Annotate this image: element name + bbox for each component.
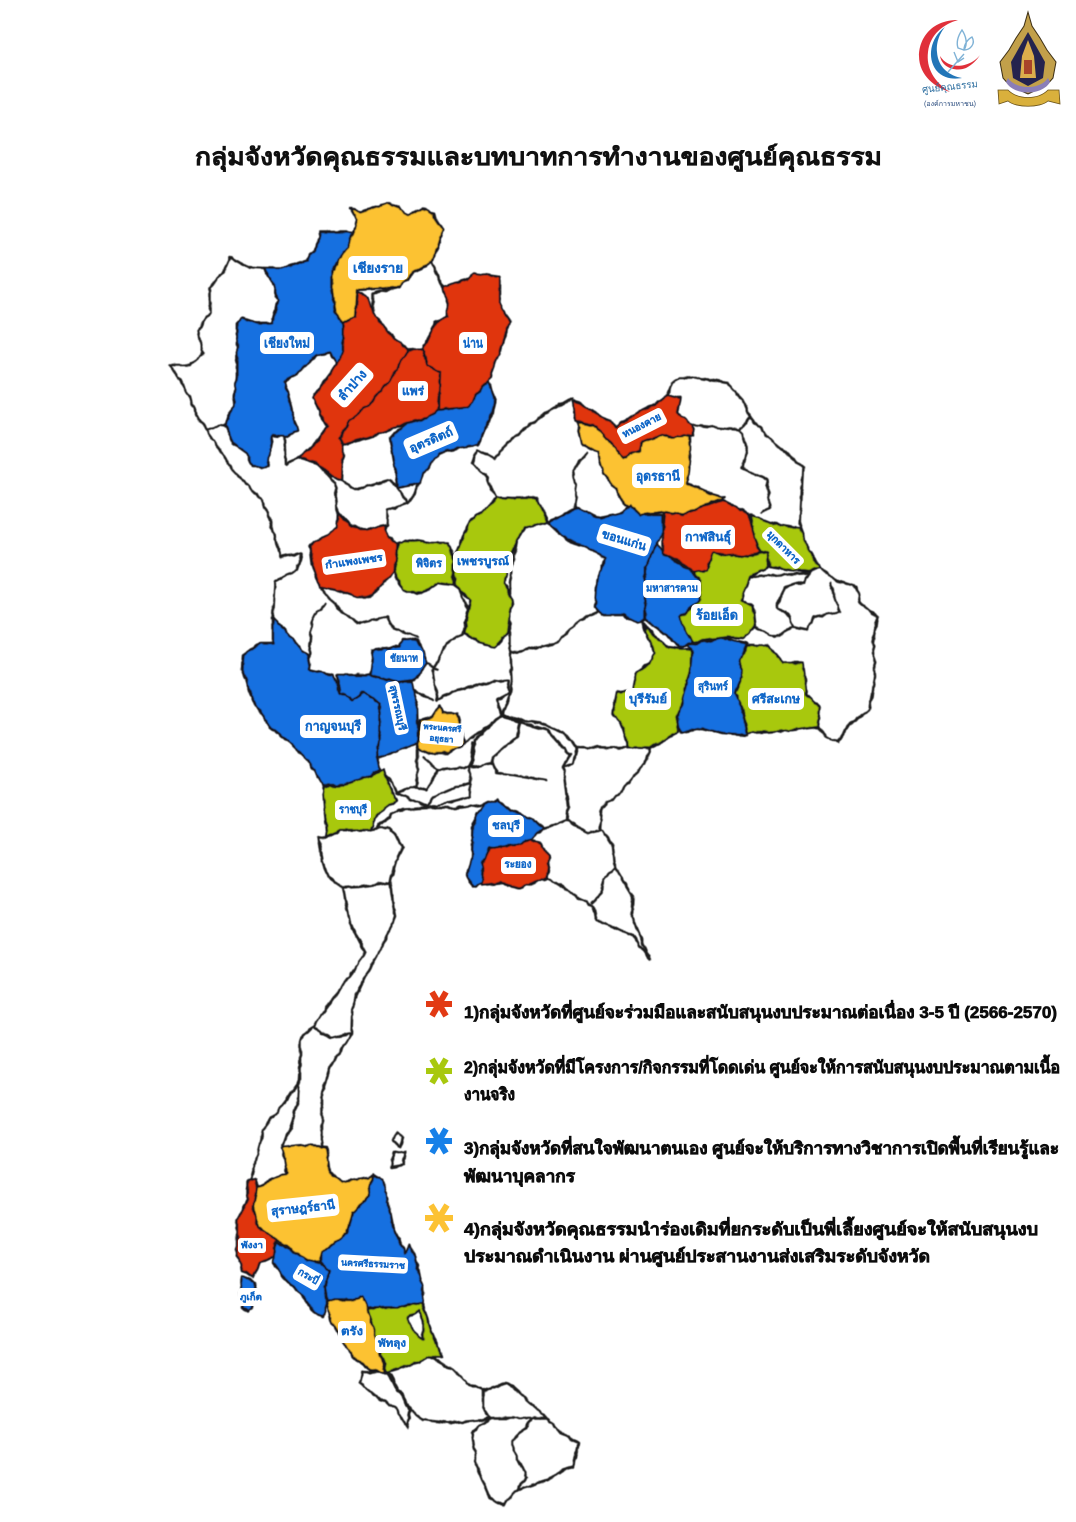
label: Suphan Buri	[385, 680, 409, 736]
label: Khon Kaen: ขอนแก่น	[600, 527, 649, 554]
province: Suphan Buri	[337, 675, 418, 757]
label: Nan	[459, 332, 487, 354]
label: Nan: น่าน	[463, 336, 483, 350]
label: Khon Kaen	[595, 523, 653, 557]
province: Nakhon Si Thammarat	[320, 1175, 423, 1308]
province: Phang Nga	[237, 1180, 277, 1277]
label: Phrae: แพร่	[402, 384, 425, 398]
label: Surin	[694, 677, 732, 697]
label: Phatthalung	[375, 1335, 409, 1353]
label: Buriram	[625, 688, 671, 710]
legend	[425, 992, 1060, 1268]
label: Kanchanaburi	[300, 715, 366, 738]
legend item 4: ประมาณดำเนินงาน ผ่านศูนย์ประสานงานส่งเสริมระดับจังหวัด	[464, 1246, 930, 1268]
province: Phuket	[240, 1277, 255, 1312]
white province outlines	[170, 257, 877, 1505]
label: Chonburi: ชลบุรี	[492, 819, 520, 833]
province: Phetchabun	[453, 497, 548, 647]
label: Mukdahan: มุกดาหาร	[764, 529, 802, 567]
logo: moral center	[919, 20, 980, 108]
province: Mae Hong Son neighbour Chiang Mai	[225, 232, 353, 467]
province: Rayong	[482, 840, 550, 888]
label: Ayutthaya	[419, 720, 465, 747]
label: Phetchabun: เพชรบูรณ์	[457, 555, 510, 569]
legend item 1	[426, 992, 1057, 1024]
label: Krabi: กระบี่	[296, 1264, 322, 1287]
label: Roi Et	[691, 604, 743, 626]
label: Kalasin	[681, 525, 735, 549]
label: Maha Sarakham: มหาสารคาม	[646, 584, 698, 594]
province: Mukdahan	[750, 515, 820, 572]
label: Sisaket: ศรีสะเกษ	[752, 692, 800, 706]
province: Nan	[423, 273, 510, 411]
label: Uttaradit	[402, 419, 460, 461]
province: Kalasin	[663, 500, 760, 572]
label: Phuket	[238, 1288, 264, 1306]
label: Buriram: บุรีรัมย์	[629, 692, 667, 707]
province: Trang	[327, 1297, 385, 1373]
label: Nong Khai: หนองคาย	[621, 412, 663, 440]
province: Chai Nat	[370, 638, 427, 682]
label: Chai Nat	[385, 650, 423, 668]
legend item 3	[426, 1129, 1059, 1187]
label: Udon Thani: อุดรธานี	[636, 468, 680, 484]
label: Kalasin: กาฬสินธุ์	[685, 530, 731, 545]
province: Kamphaeng Phet	[310, 513, 397, 597]
legend item 4	[425, 1205, 1038, 1268]
label: Nong Khai	[616, 407, 668, 445]
label: Chiang Rai	[348, 256, 408, 280]
legend item 2: งานจริง	[464, 1085, 515, 1104]
label: Roi Et: ร้อยเอ็ด	[696, 606, 738, 622]
map of Thailand	[170, 203, 877, 1505]
label: Ayutthaya: พระนครศรี	[423, 721, 463, 734]
province: Nong Khai	[573, 395, 693, 458]
label: Phetchabun	[453, 551, 513, 573]
label: Sisaket	[748, 688, 804, 710]
label: Phang Nga	[238, 1238, 266, 1253]
province: Phatthalung	[368, 1303, 442, 1372]
label: Chiang Mai: เชียงใหม่	[264, 334, 310, 350]
label: Phatthalung: พัทลุง	[378, 1338, 406, 1350]
label: Krabi	[291, 1262, 325, 1292]
province: Chiang Rai	[332, 203, 443, 323]
legend item 1: 1)กลุ่มจังหวัดที่ศูนย์จะร่วมมือและสนับสนุนงบประมาณต่อเนื่อง 3-5 ปี (2566-2570)	[464, 1000, 1057, 1024]
label: Chiang Rai: เชียงราย	[353, 260, 403, 276]
province: Surin	[677, 638, 747, 735]
label: Nakhon Si Thammarat: นครศรีธรรมราช	[341, 1257, 405, 1271]
province: Uttaradit	[390, 380, 495, 488]
province: Sisaket	[735, 645, 820, 733]
label: Kamphaeng Phet	[321, 549, 387, 575]
label: Chai Nat: ชัยนาท	[390, 652, 418, 664]
province: Khon Kaen	[548, 505, 663, 622]
label: Phang Nga: พังงา	[241, 1240, 263, 1250]
label: Phuket: ภูเก็ต	[240, 1290, 262, 1303]
province: Krabi	[273, 1242, 330, 1317]
label: Trang	[338, 1321, 366, 1343]
label: Ratchaburi	[335, 800, 371, 820]
logo: moral center: (องค์การมหาชน)	[924, 100, 976, 108]
label: Maha Sarakham	[643, 580, 701, 598]
province: Kanchanaburi	[242, 618, 380, 785]
label: Lampang: ลำปาง	[334, 367, 370, 403]
label: Mukdahan	[760, 525, 806, 571]
label: Phrae	[398, 381, 428, 401]
label: Surat Thani	[266, 1193, 340, 1223]
province: Maha Sarakham	[645, 543, 700, 647]
logo: emblem	[998, 12, 1060, 106]
label: Surin: สุรินทร์	[698, 680, 728, 694]
province: Lampang	[298, 292, 408, 480]
label: Ratchaburi: ราชบุรี	[339, 803, 367, 817]
label: Nakhon Si Thammarat	[338, 1254, 408, 1274]
province: Ratchaburi	[323, 770, 397, 838]
label: Trang: ตรัง	[341, 1325, 363, 1338]
label: Udon Thani	[632, 464, 684, 488]
province: Phichit	[396, 540, 453, 593]
label: Rayong	[501, 857, 536, 874]
label: Phichit: พิจิตร	[416, 557, 442, 570]
label: Surat Thani: สุราษฎร์ธานี	[270, 1198, 336, 1219]
logo: moral center: ศูนย์คุณธรรม	[921, 78, 978, 96]
province: Chonburi	[467, 800, 545, 887]
province: Phrae	[340, 349, 440, 445]
province: Buriram	[613, 622, 692, 748]
legend item 3: 3)กลุ่มจังหวัดที่สนใจพัฒนาตนเอง ศูนย์จะให้บริการทางวิชาการเปิดพื้นที่เรียนรู้และ	[464, 1135, 1059, 1160]
label: Chiang Mai	[260, 332, 314, 354]
label: Suphan Buri: สุพรรณบุรี	[387, 684, 408, 732]
province: Surat Thani	[253, 1145, 373, 1263]
province: Udon Thani	[577, 422, 725, 515]
province: Ayutthaya	[417, 705, 465, 753]
label: Lampang	[328, 361, 376, 409]
label: Rayong: ระยอง	[504, 860, 532, 870]
province: Roi Et	[680, 552, 768, 642]
label: Kanchanaburi: กาญจนบุรี	[305, 718, 361, 734]
legend item 4: 4)กลุ่มจังหวัดคุณธรรมนำร่องเดิมที่ยกระดับเป็นพี่เลี้ยงศูนย์จะให้สนับสนุนงบ	[464, 1216, 1038, 1241]
label: Kamphaeng Phet: กำแพงเพชร	[324, 551, 384, 571]
label: Uttaradit: อุตรดิตถ์	[407, 425, 455, 456]
province name labels	[238, 256, 806, 1353]
label: Ayutthaya: อยุธยา	[429, 733, 454, 746]
label: Chonburi	[488, 815, 524, 837]
label: Phichit	[412, 554, 446, 574]
legend item 2	[426, 1054, 1060, 1104]
title: กลุ่มจังหวัดคุณธรรมและบทบาทการทำงานของศูนย์คุณธรรม	[195, 143, 882, 173]
legend item 3: พัฒนาบุคลากร	[464, 1167, 576, 1187]
